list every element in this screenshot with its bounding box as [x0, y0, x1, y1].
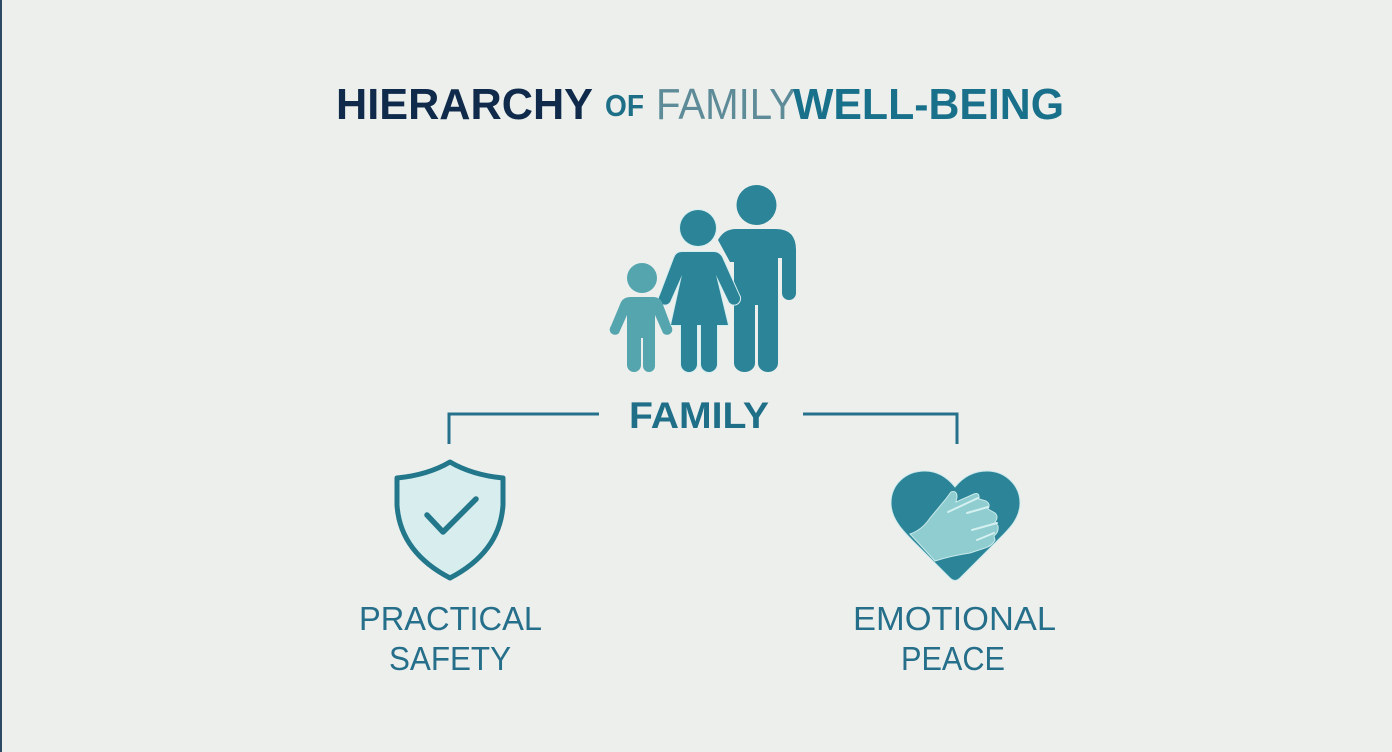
icon: heart with hand [891, 471, 1020, 580]
title: WELL-BEING [793, 80, 1064, 129]
icon: shield with check [397, 462, 503, 578]
label: practical safety [359, 600, 542, 677]
label: emotional peace: PEACE [901, 640, 1005, 677]
connector: left branch [449, 414, 599, 444]
label: family: FAMILY [629, 395, 769, 436]
figure: woman [659, 210, 740, 372]
figure: man [718, 185, 796, 372]
title [336, 80, 1064, 129]
title: OF [605, 88, 644, 123]
label: practical safety: SAFETY [389, 640, 511, 677]
label: emotional peace [853, 600, 1056, 677]
label: emotional peace: EMOTIONAL [853, 600, 1056, 637]
icon: family of three [610, 185, 796, 372]
title: HIERARCHY [336, 80, 593, 129]
figure: child [610, 263, 672, 372]
title: FAMILY [656, 80, 796, 129]
connector: right branch [803, 414, 957, 444]
hand [910, 492, 998, 561]
label: practical safety: PRACTICAL [359, 600, 542, 637]
